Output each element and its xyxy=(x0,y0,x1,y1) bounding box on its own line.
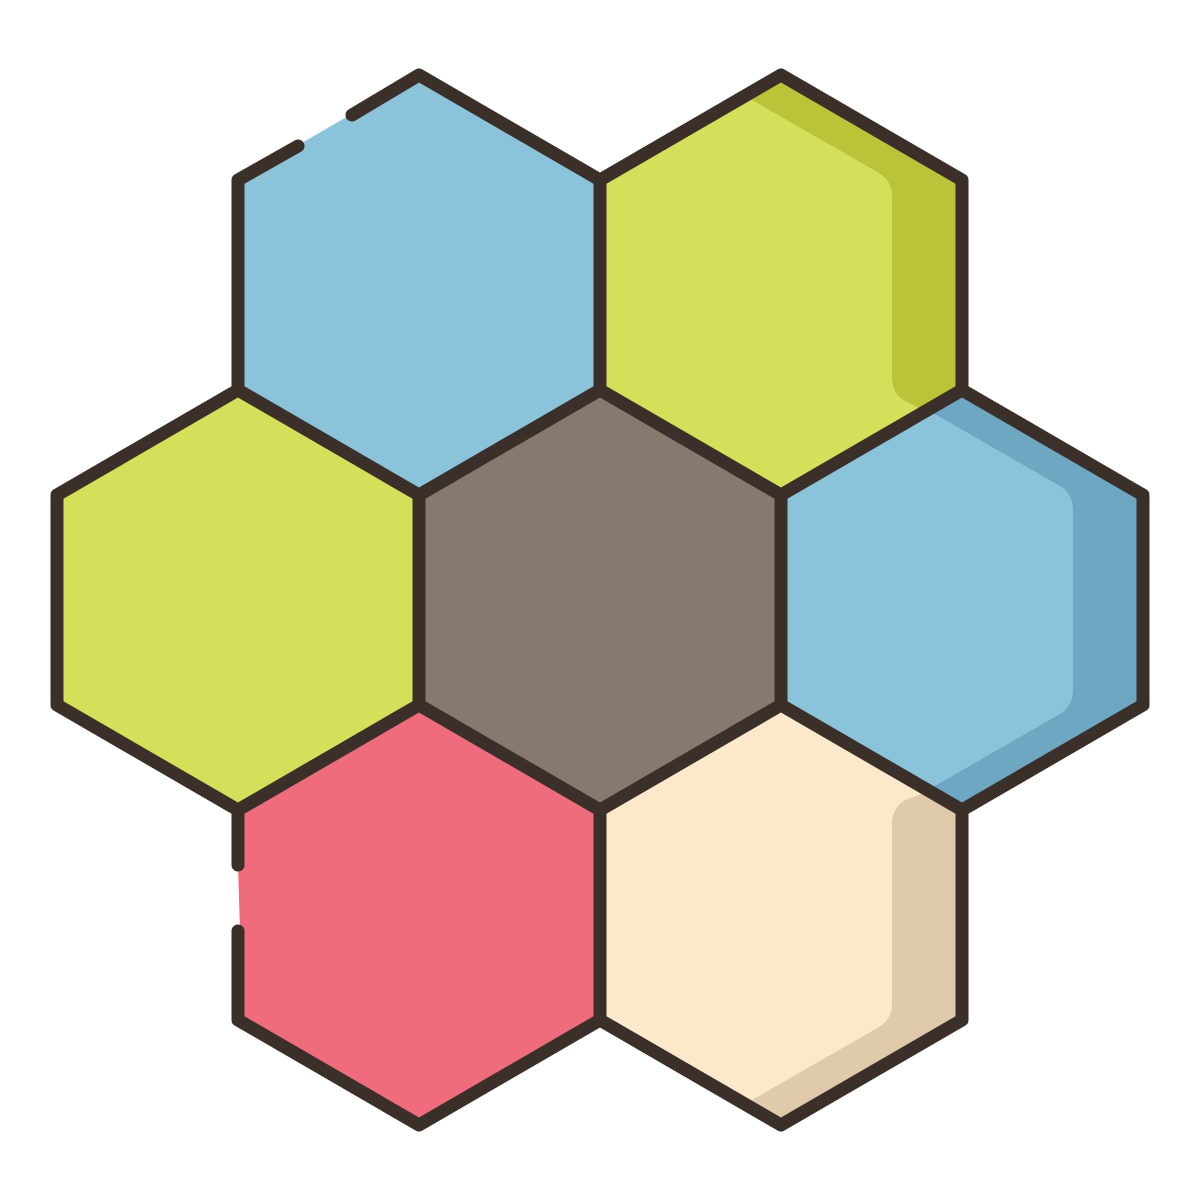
hexagon: top left blue xyxy=(238,75,600,495)
outlines xyxy=(57,75,1143,1125)
hexagon: right blue with shade xyxy=(781,390,1143,810)
hexagon: bottom left red xyxy=(238,705,600,1125)
hexagon: center brown xyxy=(419,390,781,810)
hexagon: left green xyxy=(57,390,419,810)
hexagon: top right green with shade xyxy=(600,75,962,495)
hexagon: bottom right cream with shade xyxy=(600,705,962,1125)
